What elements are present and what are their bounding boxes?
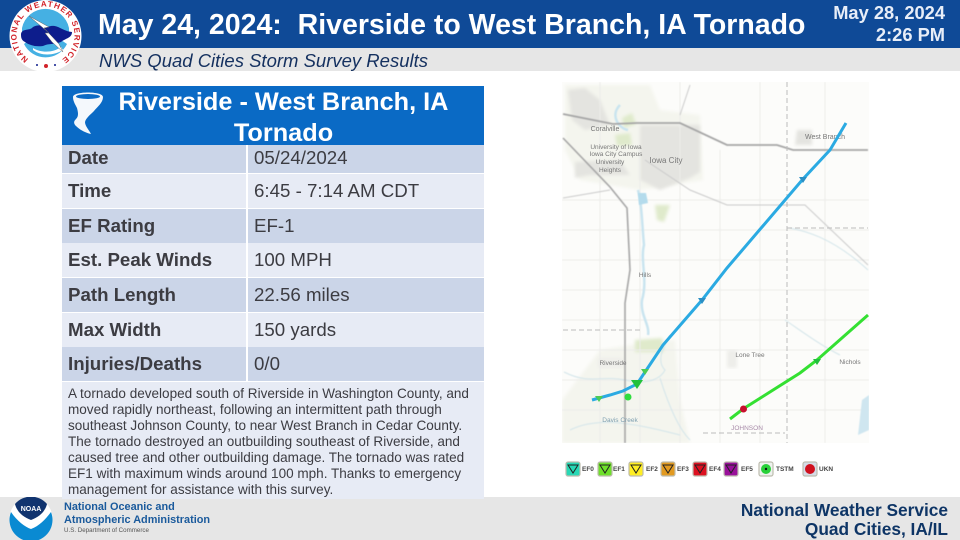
subtitle band <box>0 48 960 71</box>
map legend: EF0 <box>582 466 594 473</box>
injuries and deaths value <box>248 347 484 381</box>
map labels: University of Iowa <box>590 144 642 151</box>
map legend <box>565 461 833 477</box>
map labels: Davis Creek <box>602 417 638 424</box>
department of commerce: U.S. Department of Commerce <box>64 527 149 534</box>
map legend: EF5 <box>741 466 753 473</box>
map labels: JOHNSON <box>731 425 763 432</box>
table heading <box>62 86 484 145</box>
map: tornado tracks <box>562 82 869 443</box>
map labels: West Branch <box>805 134 845 141</box>
map legend: EF3 <box>677 466 689 473</box>
row: EF rating <box>62 209 246 243</box>
row: EF rating: EF Rating <box>68 215 155 236</box>
green tornado track <box>730 315 868 419</box>
row: time <box>62 174 246 208</box>
map legend: EF1 <box>613 466 625 473</box>
time value: 6:45 - 7:14 AM CDT <box>254 180 419 201</box>
injuries and deaths value: 0/0 <box>254 353 280 374</box>
row: peak winds: Est. Peak Winds <box>68 249 212 270</box>
description text: A tornado developed south of Riverside in Washington County, and moved rapidly northeast, following an intermittent path through southeast Johnson County, to near West Branch in Cedar County. The tornado destroyed an outbuilding southeast of Riverside, and caused tree and other outbuilding damage. The tornado was rated EF1 with maximum winds around 100 mph. Thanks to emergency management for assistance with this survey. <box>68 386 469 497</box>
row: path length: Path Length <box>68 284 176 305</box>
row: injuries and deaths <box>62 347 246 381</box>
row: date <box>62 145 246 173</box>
map labels: Lone Tree <box>735 352 765 359</box>
row: max width <box>62 313 246 347</box>
icon: NWS logo: NATIONAL WEATHER SERVICE <box>11 1 80 64</box>
row: path length <box>62 278 246 312</box>
map labels: University <box>596 159 625 166</box>
blue tornado track <box>592 123 846 402</box>
icon: NOAA logo <box>10 497 52 540</box>
panel: tornado facts table <box>62 86 484 500</box>
subtitle: NWS Quad Cities Storm Survey Results <box>99 50 428 71</box>
max width value: 150 yards <box>254 319 336 340</box>
NOAA name: National Oceanic and Atmospheric Administration <box>64 501 210 526</box>
peak winds value: 100 MPH <box>254 249 332 270</box>
path length value: 22.56 miles <box>254 284 350 305</box>
date and time stamp: May 28, 2024 2:26 PM <box>833 2 945 45</box>
map labels: Hills <box>639 272 652 279</box>
table description overlap <box>62 497 484 499</box>
map labels: Coralville <box>591 126 619 133</box>
roads <box>563 114 868 150</box>
date value: 05/24/2024 <box>254 147 348 168</box>
map labels: Iowa City Campus <box>590 151 643 158</box>
peak winds value <box>248 243 484 277</box>
river <box>615 105 648 335</box>
date value <box>248 145 484 173</box>
heading text: Riverside - West Branch, IA Tornado <box>119 88 448 146</box>
row: injuries and deaths: Injuries/Deaths <box>68 353 202 374</box>
EF rating value <box>248 209 484 243</box>
time value <box>248 174 484 208</box>
map legend: TSTM <box>776 466 794 473</box>
icon: NOAA logo: NOAA <box>21 506 41 513</box>
map labels: Nichols <box>839 359 861 366</box>
row: peak winds <box>62 243 246 277</box>
footer band <box>0 497 960 540</box>
map labels: Riverside <box>599 360 627 367</box>
EF rating value: EF-1 <box>254 215 294 236</box>
row: time: Time <box>68 180 111 201</box>
map legend: EF2 <box>646 466 658 473</box>
row: max width: Max Width <box>68 319 161 340</box>
map labels: Heights <box>599 167 622 174</box>
path length value <box>248 278 484 312</box>
map labels <box>590 126 861 432</box>
row: date: Date <box>68 147 109 168</box>
max width value <box>248 313 484 347</box>
map legend: UKN <box>819 466 833 473</box>
title: May 24, 2024: Riverside to West Branch, IA Tornado <box>98 9 805 41</box>
map legend: EF4 <box>709 466 721 473</box>
map labels: Iowa City <box>650 156 682 165</box>
office name: National Weather Service Quad Cities, IA/IL <box>741 500 948 538</box>
icon: tornado <box>73 92 103 134</box>
header band <box>0 0 960 48</box>
